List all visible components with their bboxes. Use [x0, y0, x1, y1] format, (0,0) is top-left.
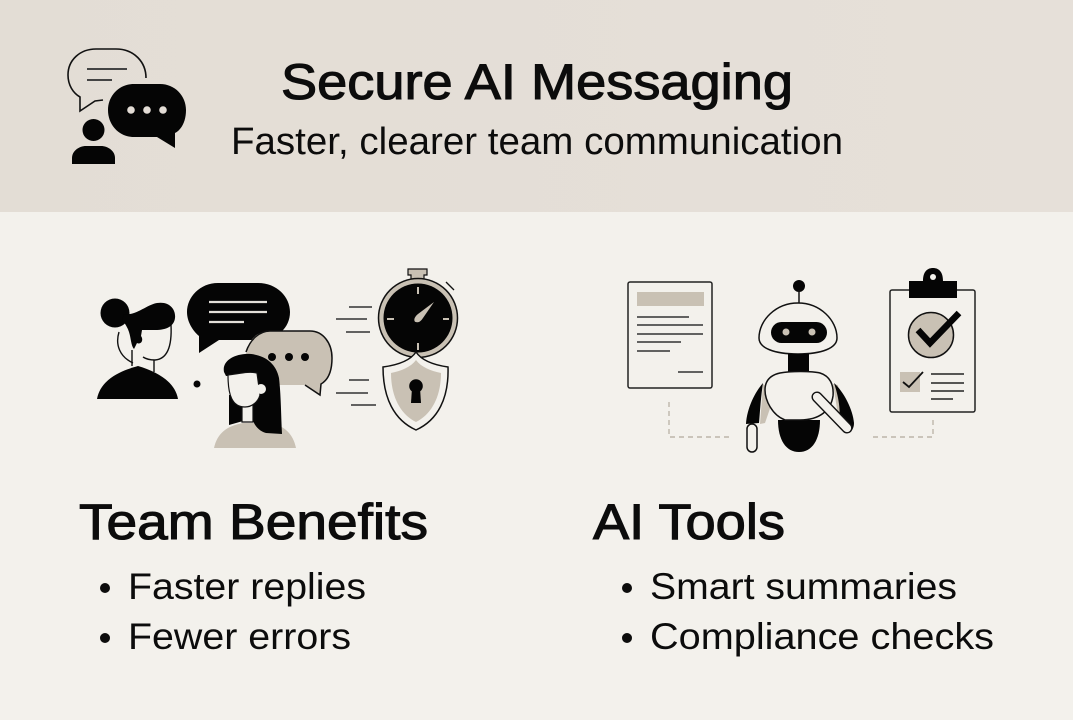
connector: document to robot [669, 402, 730, 437]
bullet list: AI tools [622, 566, 994, 657]
speed lines [336, 307, 376, 405]
bullet list: team benefits: Fewer errors [128, 616, 351, 657]
heading: team benefits: Team Benefits [79, 494, 428, 550]
bullet list: team benefits: Faster replies [128, 566, 366, 607]
bullet list: AI tools: Compliance checks [650, 616, 994, 657]
icon: stopwatch [378, 269, 458, 358]
icon: robot [746, 280, 854, 452]
header band [0, 0, 1073, 212]
icon: shield with keyhole [383, 352, 448, 430]
illustration: AI tools [628, 268, 975, 452]
connector: robot to clipboard [870, 420, 933, 437]
black speech bubble [187, 283, 290, 353]
icon: document [628, 282, 712, 388]
icon: clipboard checklist [890, 268, 975, 412]
heading: AI tools: AI Tools [593, 494, 785, 550]
illustration: team conversation [97, 269, 458, 448]
subtitle: Faster, clearer team communication [231, 121, 843, 163]
bullet list: AI tools: Smart summaries [650, 566, 957, 607]
person with hair bun [97, 298, 178, 399]
bullet list: team benefits [100, 566, 366, 657]
connector dot [194, 380, 200, 388]
icon: chat bubbles and user [68, 49, 186, 164]
title: Secure AI Messaging [281, 54, 793, 110]
tan speech bubble [246, 331, 332, 395]
person with long hair [214, 354, 296, 448]
